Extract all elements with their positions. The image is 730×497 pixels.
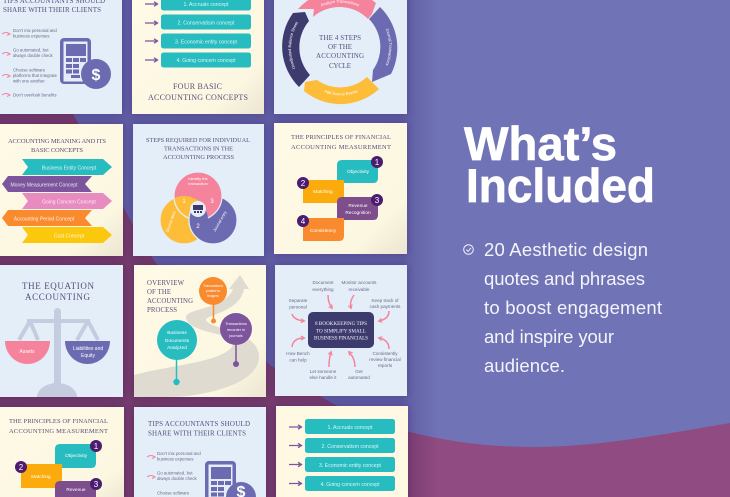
tips list repeat: Go automated, but xyxy=(157,470,193,476)
venn diagram: 3 xyxy=(210,199,214,205)
heading: four basic concepts xyxy=(148,82,248,102)
road arrow xyxy=(134,275,259,397)
title xyxy=(464,117,655,212)
pin: business documents: Analyzed xyxy=(167,345,187,351)
tip labels: automated xyxy=(348,375,370,380)
pin: posted to ledgers: posted to xyxy=(206,289,220,293)
pin: posted to ledgers: Transactions xyxy=(203,284,223,288)
heading: overview xyxy=(147,280,193,314)
tips list: with one another xyxy=(13,78,45,84)
panel: the equation accounting xyxy=(0,265,123,397)
step boxes xyxy=(297,156,383,241)
step boxes repeat: Objectivity xyxy=(65,453,88,459)
text block: description: quotes and phrases xyxy=(484,268,645,289)
text block: description: 20 Aesthetic design xyxy=(484,239,648,260)
heading: equation xyxy=(22,281,94,302)
tips list repeat xyxy=(147,451,201,496)
heading: cycle: OF THE xyxy=(328,43,352,51)
tip labels: review financial xyxy=(369,357,401,362)
heading: principles: ACCOUNTING MEASUREMENT xyxy=(291,144,391,151)
step boxes: Objectivity xyxy=(347,169,370,175)
heading: principles repeat: ACCOUNTING MEASUREMENT xyxy=(9,428,108,435)
step boxes: 3 xyxy=(375,196,380,205)
title: What’s xyxy=(464,117,617,170)
pin: business documents: Business xyxy=(167,330,187,336)
pin: business documents: Documents xyxy=(165,338,190,344)
venn diagram: Source docs xyxy=(164,210,177,233)
step boxes: 2 xyxy=(301,179,306,188)
pin: posted to ledgers: ledgers xyxy=(207,294,219,298)
concept bars repeat xyxy=(305,419,395,491)
tip labels: everything xyxy=(312,287,334,292)
cycle ring: Unadjusted Balance Sheet xyxy=(288,22,298,70)
concept bars: 3. Economic entity concept xyxy=(175,40,238,46)
heading: four basic concepts: ACCOUNTING CONCEPTS xyxy=(148,93,248,102)
step boxes repeat: 2 xyxy=(19,463,24,472)
panel: tips accountants should share (top) xyxy=(0,0,122,114)
cycle ring: Journal Transactions xyxy=(386,28,392,66)
concept bars repeat: 1. Accruals concept xyxy=(328,425,373,431)
heading: overview: PROCESS xyxy=(147,307,177,314)
pin: recorded in journals: journals xyxy=(228,334,243,338)
scale illustration: Assets xyxy=(19,349,35,355)
heading: steps required: STEPS REQUIRED FOR INDIVIDUAL xyxy=(146,137,250,144)
center box xyxy=(308,312,374,348)
heading: tips repeat xyxy=(148,420,250,438)
icon: calculator with dollar: $ xyxy=(92,67,101,84)
tips list repeat: Choose software xyxy=(157,490,190,496)
concept bars: 2. Conservatism concept xyxy=(177,20,235,26)
tip labels: reports xyxy=(378,363,393,368)
tip labels: Keep track of xyxy=(371,298,399,303)
tip labels xyxy=(286,280,401,380)
heading: tips repeat: TIPS ACCOUNTANTS SHOULD xyxy=(148,420,250,428)
pin: recorded in journals xyxy=(220,313,252,367)
arrow ribbons xyxy=(2,159,112,243)
tip labels: cash payments xyxy=(370,304,401,309)
tip labels: receivable xyxy=(349,287,370,292)
panel: principles of financial accounting measurement xyxy=(274,123,407,254)
arrow ribbons: Going Concern Concept xyxy=(42,200,96,206)
arrow ribbons: Business Entity Concept xyxy=(42,166,97,172)
cycle ring xyxy=(282,0,398,104)
arrows xyxy=(145,2,158,62)
heading: accounting meaning: ACCOUNTING MEANING AND ITS xyxy=(8,138,106,145)
heading: tips repeat: SHARE WITH THEIR CLIENTS xyxy=(148,430,246,438)
concept bars repeat: 3. Economic entity concept xyxy=(319,463,382,469)
panel: four basic concepts (bottom repeat) xyxy=(276,406,408,497)
step boxes repeat: 3 xyxy=(94,480,99,489)
scale illustration: Equity xyxy=(81,353,95,359)
heading: principles repeat: THE PRINCIPLES OF FINANCIAL xyxy=(9,418,108,425)
tips list: Don't mix personal and xyxy=(13,28,57,33)
tip labels: personal xyxy=(289,304,307,310)
venn diagram xyxy=(160,172,237,244)
center box: 8 BOOKKEEPING TIPS xyxy=(315,321,367,327)
step boxes: 1 xyxy=(375,158,380,167)
tip labels: Separate xyxy=(289,298,308,303)
heading: equation: THE EQUATION xyxy=(22,281,94,291)
tips list repeat: Don't mix personal and xyxy=(157,451,201,456)
step boxes repeat: Revenue xyxy=(66,487,86,493)
venn diagram: 2 xyxy=(196,224,200,230)
step boxes: Matching xyxy=(313,189,333,195)
concept bars: 1. Accruals concept xyxy=(184,2,229,8)
tip labels: How Bench xyxy=(286,351,310,356)
tips list: always double check xyxy=(13,53,54,58)
pin: recorded in journals: recorder in xyxy=(227,328,245,332)
tip labels: can help xyxy=(289,358,307,362)
heading: equation: ACCOUNTING xyxy=(25,292,90,302)
text block: description: and inspire your xyxy=(484,326,614,347)
heading: cycle: ACCOUNTING xyxy=(316,52,364,60)
title: Included xyxy=(466,159,655,212)
panel: 4 steps of the accounting cycle xyxy=(272,0,409,116)
tip labels: Monitor accounts xyxy=(342,280,377,285)
heading: principles repeat xyxy=(9,418,108,435)
concept bars repeat: 2. Conservatism concept xyxy=(321,444,379,450)
tip labels: Let someone xyxy=(310,369,337,374)
step boxes repeat: 1 xyxy=(94,442,99,451)
pin: posted to ledgers xyxy=(199,277,227,324)
center box: TO SIMPLIFY SMALL xyxy=(316,328,366,334)
panel: 8 bookkeeping tips xyxy=(275,265,407,396)
tips list repeat: business expenses xyxy=(157,456,194,462)
tip labels: Get xyxy=(355,369,363,374)
tips list xyxy=(2,28,58,98)
heading: overview: OVERVIEW xyxy=(147,280,185,287)
tip labels: else handle it xyxy=(309,375,337,380)
heading: overview: ACCOUNTING xyxy=(147,298,193,305)
heading: principles xyxy=(291,134,391,151)
venn diagram: Journal entry xyxy=(212,210,228,233)
heading: tips card: SHARE WITH THEIR CLIENTS xyxy=(3,6,101,14)
step boxes: Consistency xyxy=(310,228,337,234)
curved arrows xyxy=(292,295,389,367)
tip labels: Consistently xyxy=(372,351,398,356)
text block: description: audience. xyxy=(484,355,565,376)
step boxes: 4 xyxy=(301,217,306,226)
heading: steps required xyxy=(146,137,250,161)
concept bars: 4. Going concern concept xyxy=(176,58,236,64)
step boxes repeat xyxy=(15,440,102,497)
venn diagram: Identify the xyxy=(188,176,209,181)
text block: description: to boost engagement xyxy=(484,297,662,318)
pin: business documents xyxy=(157,320,197,385)
venn diagram: transaction xyxy=(188,181,208,186)
center box: BUSINESS FINANCIALS xyxy=(314,336,368,342)
tips list: Don't overlook benefits xyxy=(13,92,57,98)
heading: accounting meaning xyxy=(8,138,106,154)
heading: principles: THE PRINCIPLES OF FINANCIAL xyxy=(291,134,391,141)
step boxes: Recognition xyxy=(345,210,371,216)
arrow ribbons: Accounting Period Concept xyxy=(14,216,75,222)
venn diagram: 1 xyxy=(182,199,186,205)
tip labels: Document xyxy=(313,280,334,285)
heading: cycle xyxy=(316,34,364,70)
heading: cycle: CYCLE xyxy=(329,62,351,70)
concept bars repeat: 4. Going concern concept xyxy=(320,482,380,488)
heading: accounting meaning: BASIC CONCEPTS xyxy=(31,147,83,154)
heading: steps required: TRANSACTIONS IN THE xyxy=(164,146,233,152)
cycle ring: Add Source Events xyxy=(324,90,358,96)
tips list: Go automated, but xyxy=(13,48,49,52)
pin: recorded in journals: Transactions xyxy=(225,322,247,326)
concept bars xyxy=(161,0,251,68)
heading: four basic concepts: FOUR BASIC xyxy=(173,82,222,91)
tips list: business expenses xyxy=(13,34,50,38)
arrow ribbons: Money Measurement Concept xyxy=(11,182,78,188)
scale illustration xyxy=(5,308,110,397)
panel: accounting meaning xyxy=(0,124,123,256)
tips list: platforms that integrate xyxy=(13,73,58,78)
panel: overview of the accounting process xyxy=(134,265,266,397)
icon: check circle xyxy=(464,245,473,254)
tips list: Choose software xyxy=(13,68,46,72)
heading: steps required: ACCOUNTING PROCESS xyxy=(163,154,234,161)
panel: four basic accounting concepts (top) xyxy=(132,0,264,114)
tips list repeat: always double check xyxy=(157,476,198,481)
step boxes repeat: Matching xyxy=(31,474,51,480)
panel: principles (bottom repeat) xyxy=(0,407,124,497)
panel: steps required xyxy=(133,124,264,256)
text block: description xyxy=(484,239,662,376)
arrows repeat xyxy=(289,425,302,486)
heading: overview: OF THE xyxy=(147,289,171,296)
heading: cycle: THE 4 STEPS xyxy=(319,34,361,42)
heading: tips card xyxy=(3,0,105,14)
arrow ribbons: Cost Concept xyxy=(54,234,85,240)
panel: tips accountants (bottom repeat) xyxy=(134,407,266,497)
scale illustration: Liabilities and xyxy=(73,346,103,352)
step boxes: Revenue xyxy=(348,203,368,209)
